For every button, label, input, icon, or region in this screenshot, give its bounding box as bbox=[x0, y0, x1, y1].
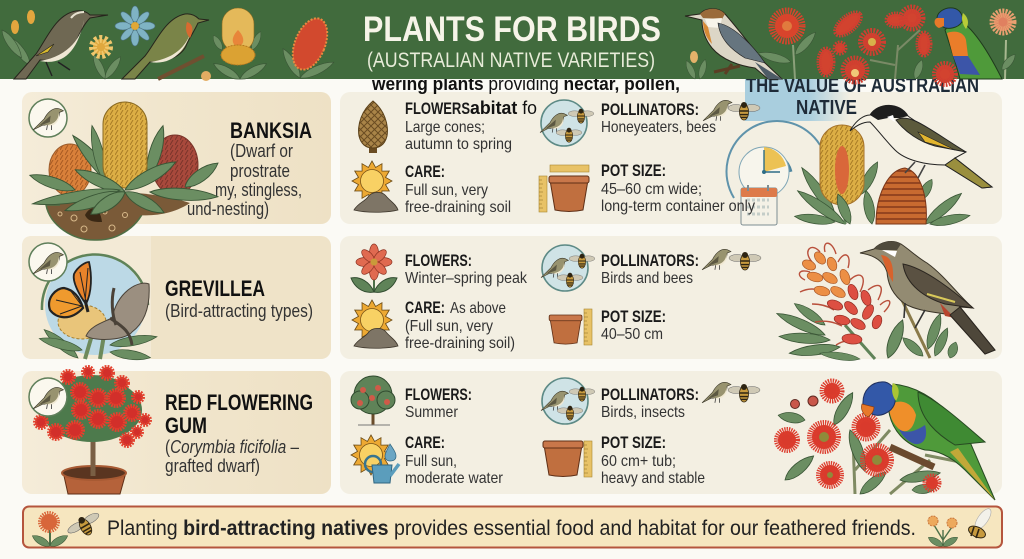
intro text fragments bbox=[371, 74, 680, 118]
care text: (Full sun, very bbox=[405, 318, 493, 335]
banksia details card bbox=[340, 75, 1002, 228]
flowers text: Winter–spring peak bbox=[405, 270, 528, 287]
icon: bird badge bbox=[29, 378, 67, 416]
heading: the value of australian native bbox=[746, 75, 979, 119]
illustration: butterfly and moth bbox=[38, 254, 158, 362]
subtitle: grafted dwarf) bbox=[165, 456, 260, 476]
panel: row 3 red flowering gum bbox=[22, 367, 1002, 500]
header art: left birds and flowers bbox=[0, 6, 336, 83]
pollinators text bbox=[601, 101, 716, 136]
pot size text: long-term container only bbox=[601, 198, 755, 215]
pollinators text bbox=[601, 252, 699, 287]
title: PLANTS FOR BIRDS bbox=[363, 10, 661, 49]
heading: banksia: BANKSIA bbox=[230, 118, 312, 143]
icon: sun and soil bbox=[352, 161, 398, 212]
icon: bird and bee bbox=[702, 382, 760, 403]
pot size text bbox=[601, 162, 755, 215]
panel: row 2 grevillea bbox=[22, 236, 1002, 363]
icon: sun and soil bbox=[352, 300, 398, 348]
icon: sun and watering can bbox=[351, 435, 399, 483]
icon: flower bbox=[351, 244, 397, 292]
icon: pollinators bbox=[540, 100, 594, 146]
intro text fragments: abitat fo bbox=[470, 98, 537, 118]
heading: grevillea: GREVILLEA bbox=[165, 276, 265, 301]
heading: the value of australian native: NATIVE bbox=[796, 97, 857, 119]
banksia name card bbox=[22, 92, 331, 240]
pollinators text: Birds, insects bbox=[601, 404, 685, 421]
care text: CARE: bbox=[405, 299, 445, 317]
header art: right bird and gum blossoms bbox=[684, 8, 1018, 83]
pollinators text: POLLINATORS: bbox=[601, 386, 699, 404]
subtitle bbox=[187, 141, 302, 219]
pollinators text bbox=[601, 386, 699, 421]
icon: bird badge bbox=[29, 243, 67, 281]
closing message: Planting bird-attracting natives provides essential food and habitat for our feathered friends. bbox=[107, 517, 916, 540]
icon: flower bbox=[31, 514, 69, 549]
flowers text bbox=[405, 100, 512, 153]
care text: CARE: bbox=[405, 163, 445, 181]
flowers text bbox=[405, 252, 528, 287]
illustration: banksia plant bbox=[28, 102, 221, 240]
pollinators text: Honeyeaters, bees bbox=[601, 119, 716, 136]
icon: tree bbox=[351, 376, 395, 425]
flowers text: FLOWERS bbox=[405, 100, 470, 118]
flowers text: Large cones; bbox=[405, 119, 485, 136]
pollinators text: Birds and bees bbox=[601, 270, 693, 287]
flowers text: Summer bbox=[405, 404, 459, 421]
illustration: potted gum tree bbox=[35, 367, 150, 494]
icon: pot and ruler bbox=[549, 309, 592, 345]
header banner bbox=[0, 0, 1024, 83]
icon: bird badge bbox=[29, 99, 67, 137]
icon: clock bbox=[726, 121, 820, 198]
flowers text: FLOWERS: bbox=[405, 252, 472, 270]
intro text fragments: wering plants providing nectar, pollen, bbox=[371, 74, 680, 94]
icon: pot and ruler bbox=[543, 441, 592, 477]
pot size text: 45–60 cm wide; bbox=[601, 181, 702, 198]
grevillea name card bbox=[22, 236, 331, 362]
icon: small flowers bbox=[927, 516, 959, 549]
grevillea details card bbox=[340, 236, 1002, 363]
pot size text: 60 cm+ tub; bbox=[601, 453, 676, 470]
heading: the value of australian native: THE VALUE OF AUSTRALIAN bbox=[746, 75, 979, 97]
heading: red flowering gum bbox=[165, 390, 313, 438]
subtitle: prostrate bbox=[230, 161, 290, 181]
pot size text: heavy and stable bbox=[601, 470, 705, 487]
care text: free-draining soil) bbox=[405, 335, 515, 352]
illustration: value panel background bbox=[745, 79, 850, 121]
footer banner bbox=[23, 506, 1002, 549]
pollinators text: POLLINATORS: bbox=[601, 252, 699, 270]
gum details card bbox=[340, 371, 1002, 500]
subtitle: my, stingless, bbox=[215, 180, 302, 200]
care text: Full sun, bbox=[405, 453, 457, 470]
pot size text bbox=[601, 308, 666, 343]
flowers text bbox=[405, 386, 472, 421]
icon: pollinators bbox=[541, 245, 595, 291]
subtitle: (Bird-attracting types) bbox=[165, 301, 313, 321]
care text bbox=[405, 434, 504, 487]
icon: bird and bee bbox=[703, 100, 760, 121]
panel: row 1 banksia bbox=[22, 75, 1002, 240]
care text: As above bbox=[450, 300, 506, 317]
gum name card bbox=[22, 367, 331, 494]
care text: Full sun, very bbox=[405, 182, 488, 199]
icon: bird and bee bbox=[702, 249, 761, 270]
subtitle: (Dwarf or bbox=[230, 141, 293, 161]
care text: CARE: bbox=[405, 434, 445, 452]
pot size text bbox=[601, 434, 705, 487]
icon: bee bbox=[65, 509, 105, 543]
pot size text: POT SIZE: bbox=[601, 162, 666, 180]
heading: red flowering gum: RED FLOWERING bbox=[165, 390, 313, 415]
heading: red flowering gum: GUM bbox=[165, 413, 207, 438]
icon: bee with wing bbox=[967, 506, 994, 540]
care text: free-draining soil bbox=[405, 199, 511, 216]
subtitle: (Corymbia ficifolia – bbox=[165, 437, 299, 457]
illustration: grevillea and honeyeater bbox=[775, 242, 995, 363]
subtitle: und-nesting) bbox=[187, 199, 269, 219]
pot size text: POT SIZE: bbox=[601, 308, 666, 326]
care text bbox=[405, 299, 515, 352]
icon: pollinators bbox=[541, 378, 595, 424]
pollinators text: POLLINATORS: bbox=[601, 101, 699, 119]
icon: pot and rulers bbox=[539, 165, 589, 212]
care text bbox=[405, 163, 511, 216]
subtitle: (AUSTRALIAN NATIVE VARIETIES) bbox=[367, 49, 655, 72]
flowers text: FLOWERS: bbox=[405, 386, 472, 404]
pot size text: POT SIZE: bbox=[601, 434, 666, 452]
pot size text: 40–50 cm bbox=[601, 326, 663, 343]
subtitle bbox=[165, 437, 299, 476]
flowers text: autumn to spring bbox=[405, 136, 512, 153]
icon: calendar bbox=[741, 185, 777, 225]
illustration: banksia and honeyeater bbox=[794, 105, 992, 228]
icon: banksia cone bbox=[359, 101, 387, 153]
illustration: gum blossoms and lorikeet bbox=[777, 382, 995, 500]
care text: moderate water bbox=[405, 470, 504, 487]
